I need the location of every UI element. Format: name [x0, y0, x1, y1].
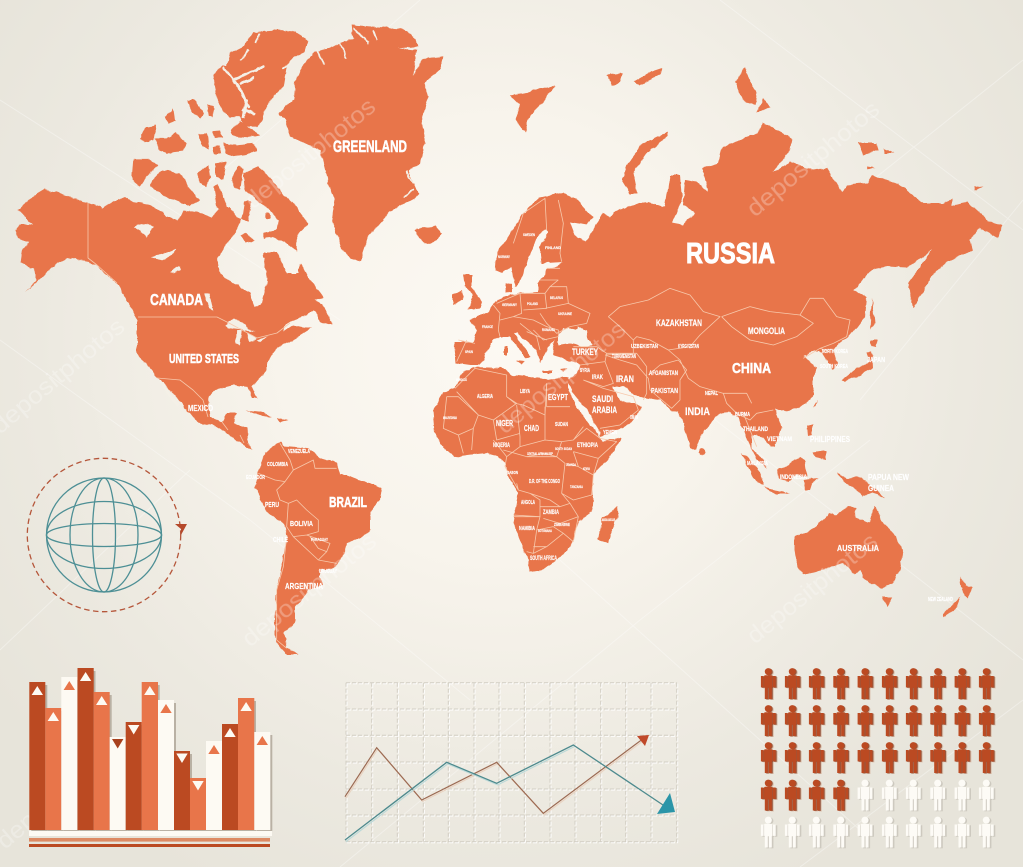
Svalbard and Arctic islands	[510, 67, 983, 191]
smaller country labels: VENEZUELA	[288, 449, 310, 455]
smaller country labels: MADAGASCAR	[602, 518, 615, 522]
smaller country labels: NORTH KOREA	[822, 349, 848, 355]
icon: globe with orbit arrow	[27, 458, 187, 612]
smaller country labels: TURKEY	[572, 347, 598, 358]
smaller country labels: JAPAN	[867, 357, 885, 364]
smaller country labels: TANZANIA	[570, 484, 583, 489]
Mediterranean islands	[504, 346, 568, 373]
smaller country labels: PAPUA NEW	[868, 473, 909, 482]
smaller country labels: TURKMENISTAN	[612, 354, 636, 360]
smaller country labels: ECUADOR	[246, 475, 265, 481]
lakes and water cut-outs	[133, 28, 413, 406]
label: Greenland: GREENLAND	[333, 137, 407, 156]
row 3	[761, 742, 996, 774]
smaller country labels: UGANDA	[566, 462, 576, 467]
Sri Lanka	[699, 449, 705, 455]
smaller country labels: FINLAND	[545, 245, 561, 250]
smaller country labels: D.R. OF THE CONGO	[529, 479, 560, 485]
smaller country labels: EGYPT	[548, 392, 569, 402]
label: Russia: RUSSIA	[686, 238, 775, 270]
smaller country labels: MONGOLIA	[748, 326, 785, 336]
smaller country labels: ZIMBABWE	[554, 522, 570, 527]
smaller country labels: VIETNAM	[767, 436, 792, 443]
smaller country labels: MAURITANIA	[443, 416, 457, 420]
smaller country labels: MOROCCO	[456, 377, 467, 382]
smaller country labels: SOUTH AFRICA	[530, 556, 557, 562]
chart base stripes	[29, 831, 272, 847]
smaller country labels: PARAGUAY	[311, 537, 328, 542]
North America	[15, 189, 333, 450]
smaller country labels: MALAYSIA	[747, 461, 768, 467]
Black Sea	[558, 326, 593, 348]
Madagascar	[598, 505, 618, 543]
row 1	[761, 668, 996, 700]
smaller country labels: MEXICO	[188, 403, 213, 413]
pictogram of people	[761, 668, 996, 848]
smaller country labels: YEMEN	[603, 430, 617, 436]
watermark text: depositphotos	[742, 96, 885, 223]
globe wireframe	[46, 478, 162, 592]
smaller country labels: KYRGYZSTAN	[678, 344, 699, 350]
smaller country labels: SPAIN	[465, 349, 473, 354]
smaller country labels: OMAN	[630, 415, 638, 421]
smaller country labels: ARABIA	[592, 405, 617, 415]
label: India: INDIA	[685, 406, 710, 418]
smaller country labels: IRAN	[616, 374, 634, 384]
smaller country labels: KENYA	[583, 466, 590, 471]
line chart	[345, 683, 678, 843]
Greenland	[278, 25, 443, 262]
smaller country labels: SYRIA	[580, 368, 590, 374]
bar chart	[29, 668, 272, 847]
watermark text: depositphotos	[240, 93, 381, 215]
Cuba and Hispaniola	[245, 410, 288, 422]
smaller country labels: SUDAN	[555, 422, 568, 428]
smaller country labels: BOLIVIA	[290, 519, 313, 528]
smaller country labels: PHILIPPINES	[810, 435, 851, 444]
smaller country labels: PAKISTAN	[651, 388, 678, 395]
smaller country labels: BOTSWANA	[538, 528, 552, 533]
smaller country labels: INDONESIA	[780, 474, 807, 481]
Sakhalin and Japan	[842, 298, 878, 382]
smaller country labels: NEPAL	[705, 391, 718, 397]
brown series	[345, 735, 649, 815]
smaller country labels: GERMANY	[502, 302, 517, 307]
smaller country labels: NIGERIA	[493, 443, 510, 449]
dashed orbit	[27, 458, 181, 612]
smaller country labels: SOUTH SUDAN	[555, 446, 572, 451]
country labels	[150, 137, 953, 603]
row 4	[761, 780, 995, 812]
smaller country labels: SOUTH KOREA	[820, 364, 848, 370]
smaller country labels: UKRAINE	[558, 311, 572, 316]
smaller country labels: KAZAKHSTAN	[656, 318, 702, 329]
bar shadows and bars	[29, 668, 272, 831]
row 2	[761, 705, 996, 737]
smaller country labels: GABON	[507, 470, 518, 475]
smaller country labels: PERU	[265, 502, 279, 509]
label: Canada: CANADA	[150, 292, 203, 309]
Denmark, UK and Ireland	[453, 275, 512, 310]
smaller country labels: CHAD	[524, 424, 539, 433]
watermark text: depositphotos	[492, 316, 631, 440]
smaller country labels: NORWAY	[498, 254, 510, 259]
Africa	[433, 367, 622, 572]
smaller country labels: GUINEA	[868, 484, 894, 493]
smaller country labels: ALGERIA	[477, 394, 493, 400]
smaller country labels: URUGUAY	[319, 569, 337, 575]
Eurasia	[454, 122, 1003, 468]
label: Brazil: BRAZIL	[329, 495, 367, 511]
smaller country labels: BURMA	[735, 412, 750, 418]
smaller country labels: BELARUS	[550, 295, 563, 300]
smaller country labels: ETHIOPIA	[577, 442, 598, 449]
smaller country labels: LIBYA	[520, 389, 530, 395]
teal series	[345, 745, 675, 842]
watermark text: depositphotos	[742, 528, 883, 650]
Arctic Canada islands	[132, 30, 308, 252]
smaller country labels: CHILE	[273, 537, 288, 544]
smaller country labels: SAUDI	[592, 394, 613, 404]
world map	[15, 25, 1003, 655]
label: China: CHINA	[732, 361, 771, 377]
watermark text: depositphotos	[237, 528, 382, 653]
label: United States: UNITED STATES	[169, 352, 239, 366]
Australia	[795, 505, 903, 588]
dashed grid	[346, 683, 678, 843]
row 5	[761, 817, 995, 848]
New Zealand	[942, 577, 973, 618]
Iceland	[414, 226, 442, 244]
smaller country labels: FRANCE	[482, 324, 493, 329]
smaller country labels: NIGER	[496, 419, 513, 428]
Novaya Zemlya	[622, 132, 668, 193]
smaller country labels: ANGOLA	[521, 500, 535, 506]
smaller country labels: NAMIBIA	[519, 526, 535, 532]
Tasmania	[882, 597, 893, 607]
label: Australia: AUSTRALIA	[837, 543, 879, 553]
bar trend triangles	[32, 672, 268, 790]
smaller country labels: ROMANIA	[542, 327, 555, 332]
smaller country labels: IRAK	[592, 375, 603, 381]
smaller country labels: ZAMBIA	[543, 509, 559, 516]
orbit arrowhead	[175, 524, 187, 535]
smaller country labels: CENTRAL AFRICAN REP	[527, 452, 553, 456]
smaller country labels: THAILAND	[743, 427, 769, 433]
country borders	[88, 198, 850, 648]
smaller country labels: NEW ZEALAND	[928, 597, 953, 603]
smaller country labels: ARGENTINA	[285, 581, 323, 591]
smaller country labels: AFGANISTAN	[649, 371, 678, 377]
South East Asia islands	[740, 400, 885, 498]
smaller country labels: COLOMBIA	[267, 462, 288, 468]
smaller country labels: SWEDEN	[523, 232, 535, 237]
smaller country labels: UZBEKISTAN	[631, 344, 658, 350]
smaller country labels: POLAND	[527, 301, 538, 306]
watermark text	[0, 93, 885, 855]
land masses	[15, 25, 1003, 655]
smaller country labels	[188, 232, 953, 603]
South America	[255, 442, 382, 655]
